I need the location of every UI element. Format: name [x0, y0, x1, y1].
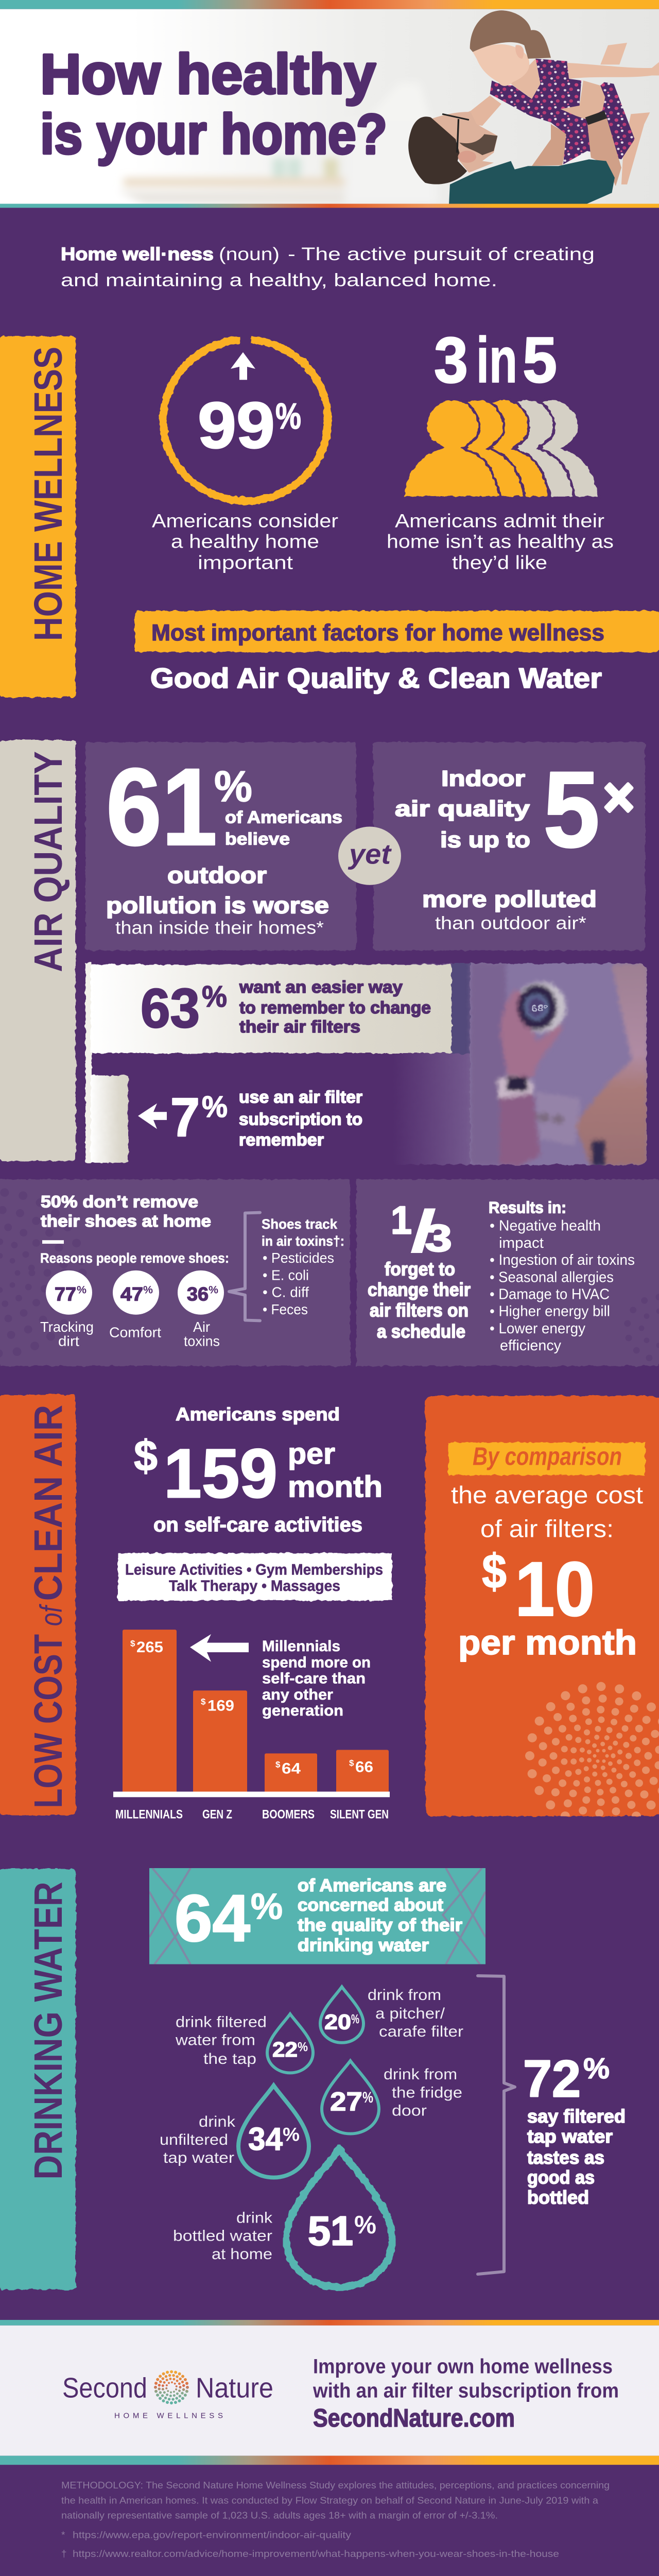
drop: 27 percent fridge: % [362, 2089, 373, 2106]
hero bottom gradient bar [0, 204, 659, 208]
text: air quality [395, 796, 530, 821]
stat: 77 percent tracking dirt: % [77, 1283, 86, 1296]
methodology [61, 2480, 610, 2559]
call to action: with an air filter subscription from [313, 2379, 619, 2402]
arrow left [138, 1104, 167, 1129]
text: air filters on [370, 1300, 469, 1321]
section tab: drinking water: DRINKING WATER [26, 1882, 71, 2179]
drop: 22 percent filtered tap: water from [175, 2032, 255, 2049]
number: 5 [543, 750, 600, 870]
axis labels: GEN Z [202, 1808, 232, 1821]
text below: more polluted [422, 886, 597, 912]
bar: silent gen: 66 [355, 1759, 373, 1775]
caption [152, 510, 338, 573]
drop: 22 percent filtered tap: 22 [272, 2038, 298, 2061]
text: a schedule [377, 1321, 465, 1342]
banner: 64 percent [149, 1868, 485, 1964]
watch [585, 111, 607, 125]
number: % [214, 763, 252, 811]
methodology: * [61, 2530, 65, 2540]
title: is your home? [40, 103, 387, 166]
drop: 27 percent fridge: the fridge [392, 2084, 462, 2101]
heading: 50% don’t remove [41, 1192, 198, 1211]
thermostat photo [360, 962, 648, 1165]
drop: 20 percent pitcher: drink from [368, 1987, 441, 2004]
text [368, 1259, 471, 1342]
number [170, 1087, 228, 1148]
methodology: https://www.epa.gov/report-environment/indoor-air-quality [73, 2530, 352, 2540]
drop: 34 percent unfiltered: unfiltered [160, 2131, 228, 2148]
drop: 27 percent fridge [322, 2061, 462, 2134]
number: $ [482, 1545, 507, 1599]
text [395, 767, 530, 852]
stat: 72 percent: say filtered [527, 2106, 626, 2127]
text: of air filters: [480, 1516, 614, 1543]
number: 10 [515, 1546, 595, 1632]
stat: 36 percent air toxins: Air [193, 1319, 210, 1335]
list: air toxins [262, 1216, 344, 1317]
text: want an easier way [239, 978, 403, 997]
drop: 51 percent bottled: at home [212, 2246, 272, 2263]
stat: 159 dollars per month [134, 1404, 383, 1536]
text: believe [225, 830, 290, 849]
stat: 99%: % [275, 397, 301, 437]
bar: millennials: $ [130, 1638, 135, 1648]
definition text: and maintaining a healthy, balanced home. [61, 270, 497, 291]
drop: 34 percent unfiltered: drink [199, 2113, 235, 2130]
bar: gen z: $ [201, 1697, 206, 1707]
number [543, 750, 634, 870]
text [298, 1876, 462, 1955]
text [239, 978, 431, 1037]
drop: 22 percent filtered tap: drink filtered [176, 2014, 267, 2030]
stat: 99% [152, 340, 338, 573]
section tab: low cost of clean air: LOW COST [26, 1634, 71, 1808]
panel: by comparison: per month [458, 1624, 637, 1662]
text: use an air filter [239, 1088, 362, 1107]
list: results: efficiency [500, 1337, 562, 1354]
drop: 27 percent fridge: 27 [330, 2087, 362, 2116]
callout: millennials spend more: Millennials [262, 1638, 340, 1655]
number: in [476, 324, 517, 396]
section tab: home wellness [0, 336, 76, 698]
section tab: air quality: AIR QUALITY [26, 751, 71, 972]
stat: 77 percent tracking dirt: 77 [55, 1283, 76, 1304]
list: air toxins: • Feces [263, 1301, 308, 1317]
number: % [202, 979, 227, 1013]
text: Indoor [441, 767, 525, 791]
people icons [403, 399, 600, 498]
methodology: https://www.realtor.com/advice/home-improvement/what-happens-when-you-wear-shoes-in-the-house [73, 2548, 559, 2559]
stat: 72 percent: tap water [527, 2126, 613, 2147]
text: than inside their homes* [115, 918, 324, 938]
bar: silent gen [336, 1750, 389, 1793]
drop: 20 percent pitcher: 20 [324, 2010, 351, 2033]
stat: 77 percent tracking dirt [40, 1270, 94, 1349]
sunburst decoration [530, 1686, 659, 1825]
text: their air filters [239, 1018, 360, 1037]
callout: millennials spend more: spend more on [262, 1654, 371, 1671]
callout: millennials spend more: generation [262, 1702, 343, 1719]
filled bar [91, 1075, 128, 1163]
drop: 51 percent bottled: 51 [308, 2208, 353, 2254]
text: the quality of their [298, 1916, 462, 1935]
banner: most important factors [135, 611, 659, 652]
arrow up [231, 352, 255, 380]
methodology: † [61, 2548, 67, 2559]
bracket [229, 1213, 260, 1320]
number: 63 [141, 978, 200, 1040]
number: 64 [175, 1881, 250, 1955]
drop: 34 percent unfiltered: % [283, 2124, 300, 2145]
callout: millennials spend more: any other [262, 1686, 333, 1703]
stat: 159 dollars per month: 159 [164, 1435, 278, 1512]
panel: up to 5x [373, 742, 645, 951]
subheading: Reasons people remove shoes: [40, 1250, 229, 1266]
axis labels [115, 1808, 389, 1821]
bracket: water sources [478, 1976, 515, 2274]
list: air toxins: • E. coli [263, 1267, 309, 1283]
list: air toxins: Shoes track [262, 1216, 337, 1232]
stat: 36 percent air toxins [178, 1270, 224, 1349]
bar: millennials: 265 [136, 1639, 163, 1656]
stat: 3 in 5 [387, 324, 614, 573]
number [482, 1545, 595, 1632]
ear [458, 151, 476, 163]
caption: home isn’t as healthy as [387, 531, 614, 552]
man's arm front [587, 116, 621, 186]
glasses [442, 114, 469, 152]
axis labels: MILLENNIALS [115, 1808, 183, 1821]
drop: 20 percent pitcher: % [351, 2012, 359, 2027]
stat: 72 percent: bottled [527, 2187, 589, 2208]
stat: 159 dollars per month: on self-care activities [153, 1514, 362, 1536]
stat: 72 percent: % [583, 2053, 610, 2085]
drop: 27 percent fridge: drink from [384, 2066, 457, 2083]
girl hair [470, 10, 551, 59]
label: By comparison [473, 1443, 622, 1471]
number: % [202, 1090, 228, 1124]
bar: boomers: 64 [282, 1760, 301, 1777]
axis labels: SILENT GEN [330, 1808, 389, 1821]
section tab: drinking water [0, 1869, 76, 2290]
drop: 51 percent bottled [173, 2149, 392, 2287]
bar: boomers: $ [275, 1760, 281, 1770]
badge: yet: yet [348, 838, 392, 870]
gradient bar below footer [0, 2456, 659, 2465]
drop: 51 percent bottled: bottled water [173, 2228, 272, 2245]
badge: yet [338, 826, 401, 885]
definition text: - The active pursuit of creating [288, 244, 595, 264]
stat: 159 dollars per month: Americans spend [176, 1404, 340, 1425]
number [175, 1881, 283, 1955]
number: 3 [434, 324, 468, 396]
man hair [408, 116, 467, 184]
number: 61 [106, 745, 217, 868]
man's hand [560, 80, 605, 119]
caption: Americans consider [152, 510, 338, 531]
bar: millennials [123, 1630, 177, 1793]
list: results: • Damage to HVAC [490, 1286, 610, 1302]
definition text [61, 244, 595, 291]
title [40, 43, 387, 166]
gradient bar above footer [0, 2320, 659, 2326]
call to action: Improve your own home wellness [313, 2354, 613, 2378]
callout: millennials spend more: self-care than [262, 1670, 366, 1687]
text below: than outdoor air* [435, 913, 586, 934]
heading: good air quality and clean water: Good Air Quality & Clean Water [150, 663, 602, 694]
card background [85, 962, 452, 1163]
box: self-care activities [118, 1553, 392, 1600]
box: self-care activities: Leisure Activities • Gym Memberships [125, 1562, 383, 1579]
list: results: • Lower energy [490, 1320, 586, 1337]
arrow: to millennials [190, 1634, 249, 1662]
stat: 72 percent: 72 [523, 2049, 581, 2108]
text: the average cost [451, 1482, 643, 1509]
stat: 47 percent comfort: 47 [120, 1283, 143, 1304]
number: 7 [170, 1087, 200, 1148]
girl chest [511, 59, 541, 99]
panel: shoes [0, 1179, 350, 1366]
list: results: • Seasonal allergies [490, 1269, 614, 1285]
top gradient bar [0, 0, 659, 9]
text: subscription to [239, 1110, 362, 1129]
number: × [603, 767, 634, 828]
bar: boomers [265, 1753, 317, 1793]
icon: logo sunburst [155, 2372, 187, 2403]
list: results: impact [499, 1235, 544, 1251]
list: results [489, 1198, 635, 1354]
man's arm behind [532, 124, 568, 166]
list: results: • Higher energy bill [490, 1303, 610, 1320]
card: 63 percent [85, 962, 452, 1163]
stat: 47 percent comfort: % [143, 1283, 153, 1296]
call to action: SecondNature.com [313, 2404, 515, 2432]
methodology: the health in American homes. It was conducted by Flow Strategy on behalf of Second Nature in June-July 2019 with a [61, 2495, 599, 2505]
caption: important [198, 552, 293, 573]
caption: they’d like [452, 552, 547, 573]
shirt [449, 159, 615, 204]
call to action [313, 2354, 619, 2432]
fraction: 1 [391, 1198, 412, 1242]
text: change their [368, 1279, 471, 1300]
drop: 22 percent filtered tap: the tap [203, 2050, 256, 2067]
section tab: air quality [0, 740, 76, 1161]
hero [0, 9, 659, 204]
text [451, 1482, 643, 1543]
section tab: low cost of clean air: of [33, 1604, 68, 1626]
drop: 20 percent pitcher: a pitcher/ [375, 2005, 445, 2022]
panel: 61 percent [85, 742, 356, 951]
drop: 22 percent filtered tap [175, 2014, 313, 2073]
stat: 159 dollars per month: month [288, 1469, 383, 1503]
stat: 72 percent: good as [527, 2167, 595, 2188]
heading [41, 1192, 211, 1230]
list: results: • Ingestion of air toxins [490, 1252, 635, 1268]
fraction: 3 [425, 1217, 452, 1260]
list: air toxins: • Pesticides [263, 1250, 334, 1266]
list: results: • Negative health [490, 1218, 601, 1234]
hero photo: father lifting daughter [0, 9, 659, 204]
stat: 77 percent tracking dirt: Tracking [40, 1319, 94, 1335]
caption: a healthy home [171, 531, 319, 552]
girl outstretched arm [567, 62, 659, 79]
fraction [391, 1198, 452, 1264]
number [434, 324, 557, 396]
heading: their shoes at home [41, 1211, 211, 1230]
stat: 72 percent [523, 2049, 626, 2208]
logo: second nature: Second [62, 2372, 147, 2403]
bar chart [113, 1630, 390, 1821]
text: pollution is worse [106, 892, 329, 918]
text: forget to [385, 1259, 455, 1279]
section tab: low cost of clean air: CLEAN AIR [26, 1405, 71, 1601]
bar: gen z: 169 [207, 1698, 234, 1714]
methodology: nationally representative sample of 1,023 U.S. adults ages 18+ with a margin of error of +/-3.1%. [61, 2510, 498, 2521]
text [106, 808, 342, 938]
drop: 20 percent pitcher: carafe filter [379, 2023, 463, 2040]
drop: 34 percent unfiltered [160, 2086, 309, 2178]
bar: silent gen: $ [349, 1758, 354, 1768]
panel: by comparison [425, 1396, 659, 1825]
logo: second nature: Nature [196, 2372, 273, 2403]
caption [387, 510, 614, 573]
number: 99 [198, 389, 275, 462]
footer panel [0, 2326, 659, 2456]
girl legs [600, 43, 627, 64]
girl arm [468, 96, 501, 126]
stat: 36 percent air toxins: % [209, 1283, 218, 1296]
stat: 36 percent air toxins: 36 [187, 1283, 209, 1304]
stat: 77 percent tracking dirt: dirt [58, 1333, 79, 1349]
title: How healthy [40, 43, 376, 106]
number: 5 [523, 324, 557, 396]
drop: 51 percent bottled: drink [236, 2210, 272, 2226]
list: air toxins: in air toxins†: [262, 1233, 344, 1249]
bar: gen z [193, 1690, 247, 1793]
logo: second nature: HOME WELLNESS [114, 2412, 223, 2420]
stat: 159 dollars per month: per [288, 1437, 335, 1470]
text below [422, 886, 597, 934]
text: of Americans [225, 808, 342, 827]
drop: 34 percent unfiltered: 34 [248, 2122, 283, 2157]
definition text: Home well·ness [61, 244, 214, 264]
text: remember [239, 1131, 324, 1150]
drop: 51 percent bottled: % [354, 2211, 376, 2239]
thermostat reading: 68° [531, 1003, 548, 1014]
text: of Americans are [298, 1876, 446, 1895]
logo: second nature [62, 2372, 273, 2420]
section tab: home wellness: HOME WELLNESS [26, 347, 71, 641]
banner: most important factors: Most important factors for home wellness [151, 620, 604, 646]
text: to remember to change [239, 998, 431, 1018]
stat: 47 percent comfort [109, 1270, 161, 1341]
drop: 34 percent unfiltered: tap water [163, 2150, 234, 2166]
section tab: low cost of clean air [0, 1395, 76, 1815]
drop: 22 percent filtered tap: % [298, 2040, 308, 2054]
text: outdoor [167, 862, 267, 888]
number: % [251, 1887, 283, 1927]
girl face [473, 44, 529, 86]
card: 7 percent [91, 1075, 362, 1163]
stat: 47 percent comfort: Comfort [109, 1325, 161, 1341]
methodology: METHODOLOGY: The Second Nature Home Wellness Study explores the attitudes, perceptions, and practices concerning [61, 2480, 610, 2490]
callout: millennials spend more [262, 1638, 371, 1719]
list: air toxins: • C. diff [263, 1284, 309, 1300]
drop: 27 percent fridge: door [392, 2103, 427, 2119]
definition text: (noun) [219, 244, 280, 264]
text: concerned about [298, 1895, 443, 1915]
text: is up to [440, 828, 530, 852]
list: results: Results in: [489, 1198, 566, 1216]
fraction: / [410, 1198, 437, 1264]
stat: 36 percent air toxins: toxins [184, 1333, 220, 1349]
box: self-care activities: Talk Therapy • Massages [169, 1578, 340, 1595]
text: drinking water [298, 1936, 429, 1955]
drop: 20 percent pitcher [320, 1987, 463, 2043]
text [239, 1088, 362, 1150]
axis labels: BOOMERS [262, 1808, 315, 1821]
dress [490, 59, 635, 164]
stat: 159 dollars per month: $ [134, 1432, 158, 1480]
man face [431, 112, 497, 173]
beard [459, 134, 497, 155]
stat: 72 percent: tastes as [527, 2147, 604, 2168]
caption: Americans admit their [395, 510, 604, 531]
panel: one third [356, 1179, 659, 1366]
ring chart [163, 340, 328, 501]
